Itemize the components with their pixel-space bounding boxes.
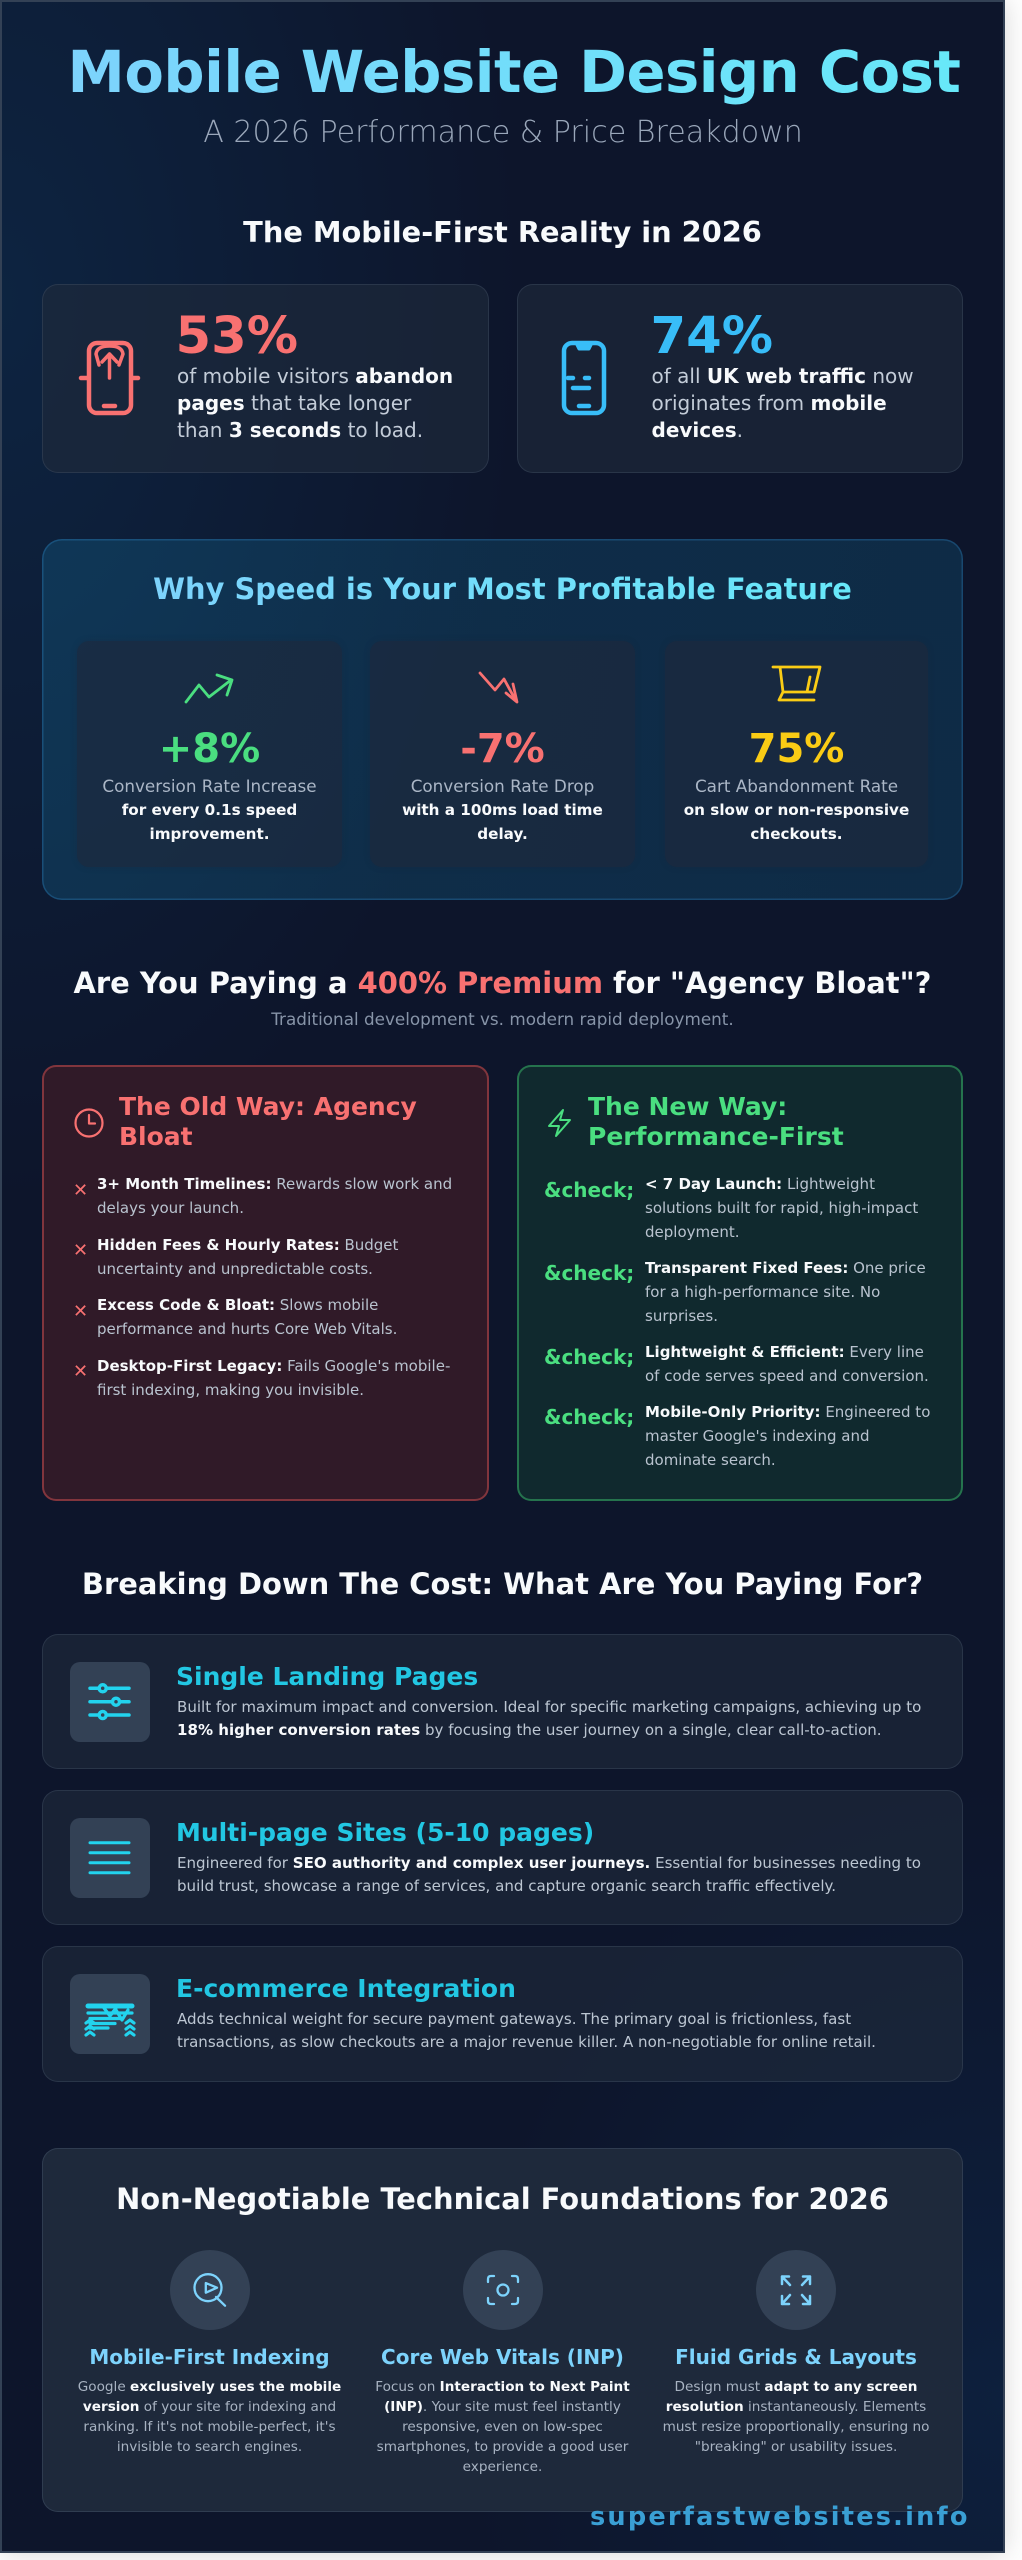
list item: 3+ Month Timelines: Rewards slow work and xyxy=(97,1175,452,1193)
label: delay. xyxy=(477,825,528,843)
label xyxy=(684,776,909,843)
column: core web vitals xyxy=(375,2250,630,2475)
icon: lines xyxy=(88,1841,130,1874)
icon: cart xyxy=(772,666,822,702)
text: 18% higher conversion rates by focusing the user journey on a single, clear call-to-action. xyxy=(177,1721,882,1739)
label xyxy=(102,776,317,843)
stat number: +8% xyxy=(159,726,260,772)
list item: uncertainty and unpredictable costs. xyxy=(97,1260,373,1278)
label: Conversion Rate Drop xyxy=(411,776,594,796)
list item: Hidden Fees & Hourly Rates: Budget xyxy=(97,1236,398,1254)
subheading: Traditional development vs. modern rapid deployment. xyxy=(271,1009,734,1029)
list item: Desktop-First Legacy: Fails Google's mobile- xyxy=(97,1357,450,1375)
mark: &check; xyxy=(544,1261,634,1285)
heading: Multi-page Sites (5-10 pages) xyxy=(176,1818,594,1847)
text: Google exclusively uses the mobile xyxy=(78,2379,341,2395)
text: (INP). Your site must feel instantly xyxy=(384,2399,621,2415)
column: mobile-first indexing xyxy=(78,2250,341,2455)
card: cart abandonment xyxy=(665,641,928,867)
heading: Mobile-First Indexing xyxy=(89,2345,330,2369)
title: Mobile Website Design Cost xyxy=(68,39,960,106)
list item xyxy=(97,1236,398,1278)
label: on slow or non-responsive xyxy=(684,801,909,819)
heading: cost breakdown: Breaking Down The Cost: What Are You Paying For? xyxy=(82,1567,923,1601)
text: "breaking" or usability issues. xyxy=(695,2439,897,2455)
heading: E-commerce Integration xyxy=(176,1974,516,2003)
mark: &check; xyxy=(544,1405,634,1429)
heading: Core Web Vitals (INP) xyxy=(381,2345,624,2369)
column: fluid grids xyxy=(663,2250,929,2455)
text xyxy=(177,1854,921,1895)
label: for every 0.1s speed xyxy=(122,801,297,819)
panel: why speed xyxy=(42,539,963,900)
panel: e-commerce xyxy=(42,1946,963,2082)
stat text xyxy=(177,364,453,442)
card: conversion drop xyxy=(370,641,635,867)
list item: Transparent Fixed Fees: One price xyxy=(645,1259,926,1277)
heading xyxy=(119,1092,417,1151)
stat text: pages that take longer xyxy=(177,391,411,415)
heading: Fluid Grids & Layouts xyxy=(675,2345,917,2369)
stat text: of all UK web traffic now xyxy=(652,364,914,388)
text: must resize proportionally, ensuring no xyxy=(663,2419,929,2435)
icon: clock xyxy=(74,1108,104,1138)
stat text xyxy=(652,364,914,442)
text: version of your site for indexing and xyxy=(83,2399,336,2415)
text: experience. xyxy=(463,2459,542,2475)
list item xyxy=(645,1175,918,1241)
text: responsive, even on low-spec xyxy=(402,2419,603,2435)
heading: why speed: Why Speed is Your Most Profitable Feature xyxy=(153,572,852,606)
text: Focus on Interaction to Next Paint xyxy=(375,2379,630,2395)
heading: Performance-First xyxy=(588,1122,844,1151)
heading: premium: Are You Paying a 400% Premium for "Agency Bloat"? xyxy=(74,966,931,1000)
icon: phone with upload arrow xyxy=(78,340,140,416)
text: Engineered for SEO authority and complex user journeys. Essential for businesses needing to xyxy=(177,1854,921,1872)
stat number: 53% xyxy=(176,306,298,366)
label: improvement. xyxy=(150,825,270,843)
icon: search play xyxy=(170,2250,250,2330)
icon: phone xyxy=(562,340,606,416)
heading: The New Way: xyxy=(588,1092,787,1121)
list item: < 7 Day Launch: Lightweight xyxy=(645,1175,875,1193)
list item: solutions built for rapid, high-impact xyxy=(645,1199,918,1217)
text xyxy=(375,2379,630,2475)
text: build trust, showcase a range of services, and capture organic search traffic effectively. xyxy=(177,1877,836,1895)
list item: performance and hurts Core Web Vitals. xyxy=(97,1320,397,1338)
label: with a 100ms load time xyxy=(402,801,603,819)
stat text: devices. xyxy=(652,418,743,442)
list item: deployment. xyxy=(645,1223,740,1241)
heading xyxy=(588,1092,844,1151)
subtitle: A 2026 Performance & Price Breakdown xyxy=(203,115,803,150)
text xyxy=(663,2379,929,2455)
panel: old way xyxy=(42,1065,489,1501)
list item xyxy=(645,1259,926,1325)
heading: Non-Negotiable Technical Foundations for 2026 xyxy=(116,2182,889,2216)
list item: Mobile-Only Priority: Engineered to xyxy=(645,1403,930,1421)
stat number: 75% xyxy=(749,726,844,772)
stat number: 74% xyxy=(650,306,773,366)
text: ranking. If it's not mobile-perfect, it's xyxy=(83,2419,336,2435)
list item: delays your launch. xyxy=(97,1199,244,1217)
panel: new way xyxy=(517,1065,963,1501)
mark: &check; xyxy=(544,1178,634,1202)
label: checkouts. xyxy=(750,825,843,843)
heading: Bloat xyxy=(119,1122,193,1151)
list item xyxy=(645,1343,929,1385)
mark: ✕ xyxy=(73,1240,88,1261)
label: Cart Abandonment Rate xyxy=(695,776,898,796)
heading: mobile-first reality: The Mobile-First Reality in 2026 xyxy=(243,215,762,249)
list item: Lightweight & Efficient: Every line xyxy=(645,1343,924,1361)
text: transactions, as slow checkouts are a major revenue killer. A non-negotiable for online retail. xyxy=(177,2033,876,2051)
icon box: sliders xyxy=(70,1662,150,1742)
stat number: -7% xyxy=(460,726,545,772)
mark: &check; xyxy=(544,1345,634,1369)
list item: master Google's indexing and xyxy=(645,1427,870,1445)
stat text: originates from mobile xyxy=(652,391,887,415)
icon: commerce xyxy=(84,2004,136,2037)
mark: ✕ xyxy=(73,1180,88,1201)
list item: of code serves speed and conversion. xyxy=(645,1367,929,1385)
heading: The Old Way: Agency xyxy=(119,1092,417,1121)
label: Conversion Rate Increase xyxy=(102,776,317,796)
icon: scan xyxy=(462,2250,542,2330)
text: Design must adapt to any screen xyxy=(675,2379,917,2395)
stat text: of mobile visitors abandon xyxy=(177,364,453,388)
list item: first indexing, making you invisible. xyxy=(97,1381,364,1399)
list item: Excess Code & Bloat: Slows mobile xyxy=(97,1296,378,1314)
icon: expand arrows xyxy=(756,2250,836,2330)
icon box: lines xyxy=(70,1818,150,1898)
panel: multi-page sites xyxy=(42,1790,963,1925)
panel: single landing pages xyxy=(42,1634,963,1769)
list item xyxy=(97,1175,452,1217)
list item: for a high-performance site. No xyxy=(645,1283,880,1301)
text: Built for maximum impact and conversion. Ideal for specific marketing campaigns, achieving up to xyxy=(177,1698,921,1716)
mark: ✕ xyxy=(73,1301,88,1322)
panel: 53% stat card xyxy=(42,284,489,472)
label xyxy=(402,776,603,843)
icon box: commerce xyxy=(70,1974,150,2054)
icon: trending down xyxy=(478,672,518,704)
mark: ✕ xyxy=(73,1361,88,1382)
text xyxy=(177,1698,921,1739)
list item: surprises. xyxy=(645,1307,718,1325)
list item xyxy=(97,1357,450,1399)
panel: 74% stat card xyxy=(517,284,963,472)
icon: lightning xyxy=(548,1109,571,1137)
text: smartphones, to provide a good user xyxy=(377,2439,628,2455)
list item xyxy=(645,1403,930,1469)
text: resolution instantaneously. Elements xyxy=(666,2399,926,2415)
footer url: superfastwebsites.info xyxy=(590,2502,970,2532)
list item xyxy=(97,1296,397,1338)
text xyxy=(78,2379,341,2455)
icon: trending up xyxy=(184,674,234,704)
text: Adds technical weight for secure payment gateways. The primary goal is frictionless, fast xyxy=(177,2010,851,2028)
text: invisible to search engines. xyxy=(117,2439,302,2455)
text xyxy=(177,2010,876,2051)
stat text: than 3 seconds to load. xyxy=(177,418,423,442)
panel: technical foundations xyxy=(42,2148,963,2512)
list item: dominate search. xyxy=(645,1451,776,1469)
heading: Single Landing Pages xyxy=(176,1662,478,1691)
card: conversion increase xyxy=(77,641,342,867)
icon: sliders xyxy=(88,1683,131,1720)
